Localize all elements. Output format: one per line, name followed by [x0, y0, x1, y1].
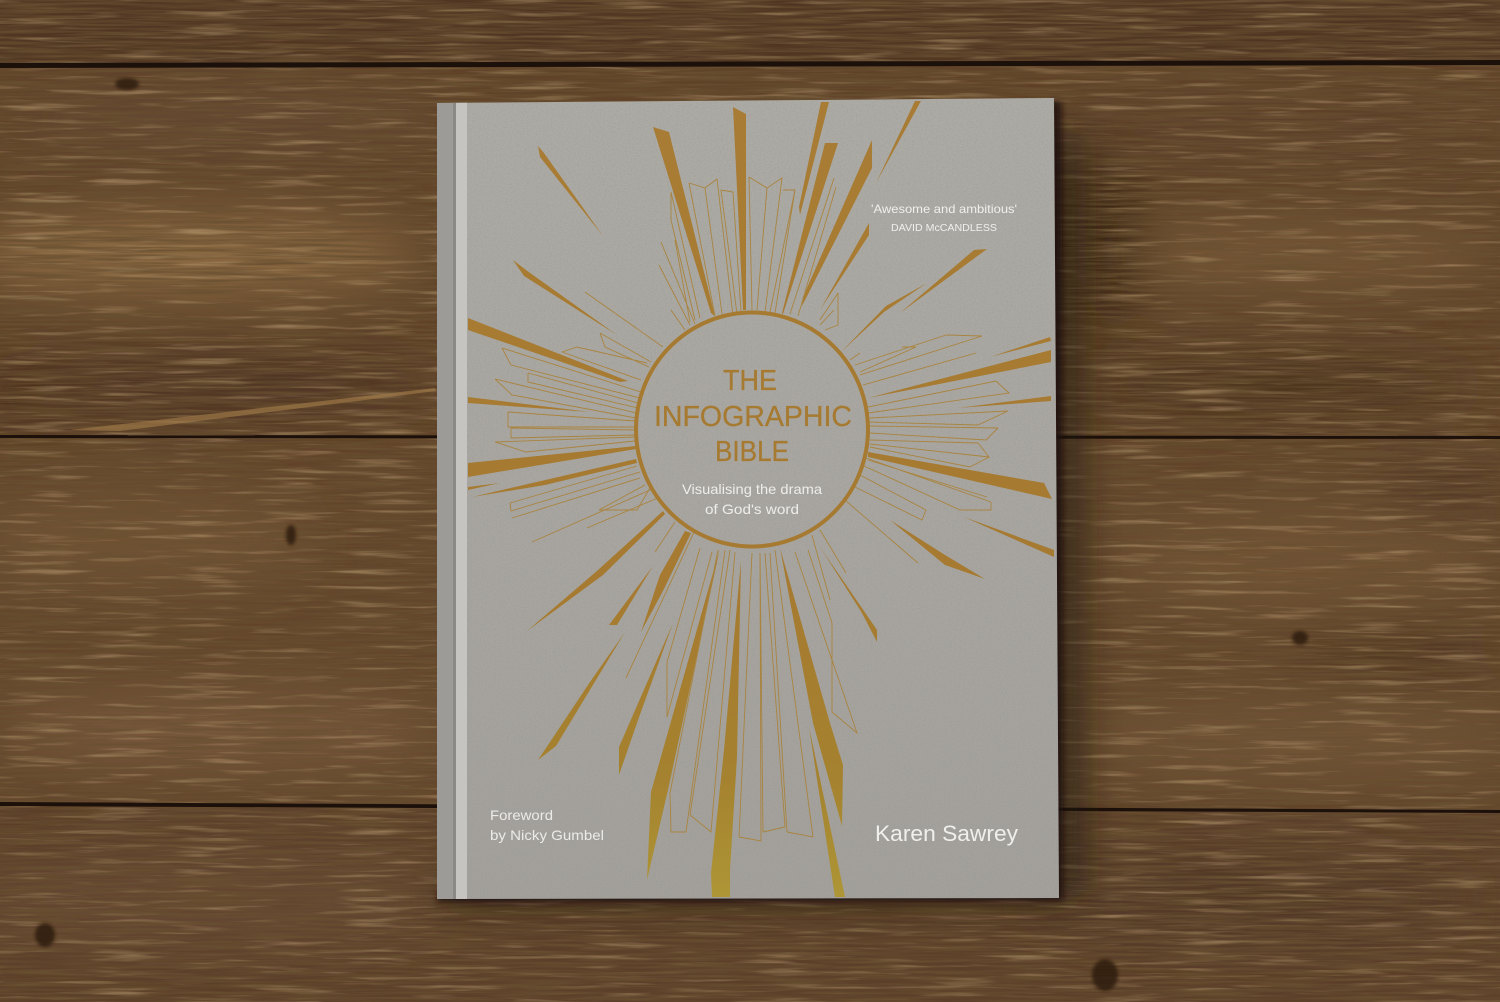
foreword credit: Foreword — [490, 807, 553, 823]
subtitle — [682, 484, 822, 514]
plank: middle — [0, 438, 1500, 804]
wood knots — [35, 78, 1308, 991]
bottom fan — [626, 522, 857, 841]
endorsement quote: DAVID McCANDLESS — [891, 222, 997, 234]
author name: Karen Sawrey — [875, 821, 1018, 846]
endorsement quote — [872, 204, 1016, 231]
subtitle: of God's word — [705, 501, 799, 517]
title: BIBLE — [715, 436, 789, 468]
book cover — [437, 95, 1062, 901]
title: INFOGRAPHIC — [654, 401, 852, 433]
plank: upper — [0, 68, 1500, 436]
plank gaps — [0, 60, 1500, 813]
book spine — [437, 102, 455, 764]
subtitle: Visualising the drama — [682, 481, 822, 497]
foreword credit: by Nicky Gumbel — [490, 827, 604, 843]
book — [437, 95, 1062, 901]
title — [656, 370, 851, 462]
title: THE — [723, 365, 777, 397]
title circle — [636, 312, 868, 546]
endorsement quote: 'Awesome and ambitious' — [871, 202, 1017, 216]
foreword credit — [490, 807, 604, 843]
right fan — [845, 335, 1009, 563]
sunburst thin outlines — [495, 177, 1009, 841]
book shadow — [437, 125, 1088, 906]
plank: top — [0, 0, 1500, 64]
plank: bottom — [0, 808, 1500, 1002]
top fan — [659, 177, 838, 330]
sunburst gold rays — [468, 101, 1054, 897]
left fan — [495, 292, 663, 542]
light scratch on upper plank — [70, 388, 436, 431]
